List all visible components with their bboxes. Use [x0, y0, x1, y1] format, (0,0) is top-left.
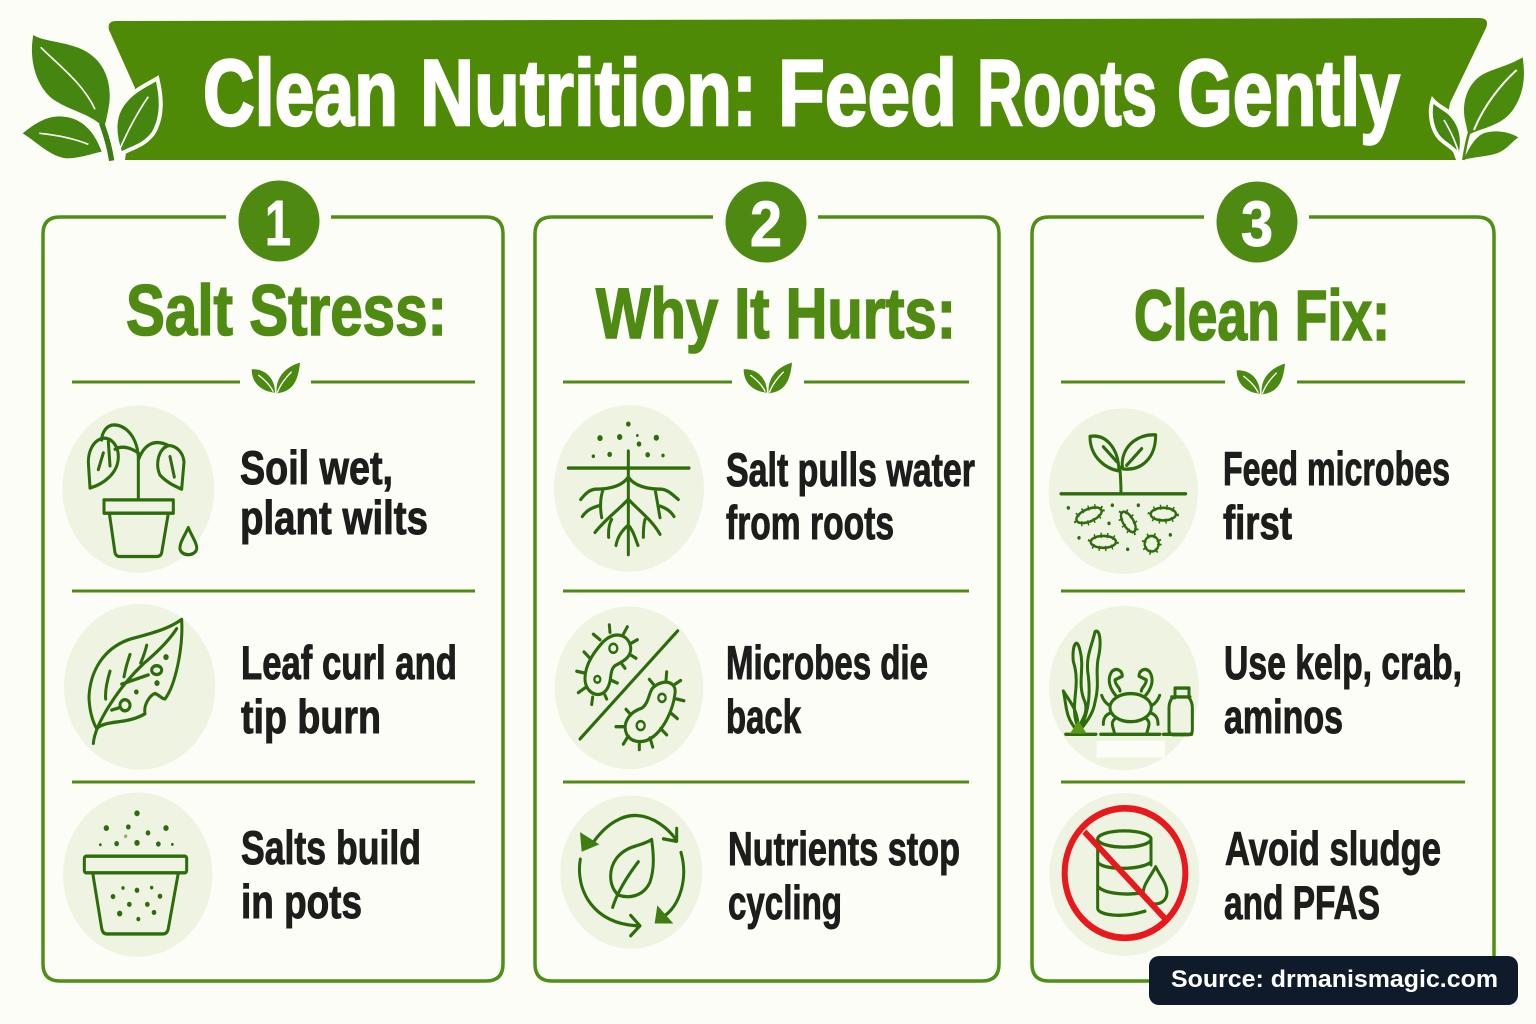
source badge	[1149, 956, 1518, 1005]
title text: Roots	[977, 40, 1157, 145]
title text: Clean	[203, 40, 398, 145]
icon: kelp, crab and jar	[1049, 606, 1199, 770]
title banner	[109, 18, 1487, 160]
text: avoid sludge: Avoid sludge	[1225, 822, 1441, 875]
text: salts build: Salts build	[241, 821, 421, 874]
title text	[203, 40, 1400, 145]
text: microbes die back: Microbes die	[726, 636, 928, 689]
heading: why it hurts: Why It Hurts:	[596, 275, 956, 354]
icon: leaf with cycling arrows	[560, 796, 702, 949]
text: soil wet	[240, 441, 428, 544]
row: leaf curl	[64, 604, 457, 770]
title text: Feed	[778, 40, 957, 145]
text: feed microbes: first	[1223, 496, 1292, 549]
number badge 1: 1	[265, 187, 291, 259]
text: salt pulls water: from roots	[726, 496, 894, 549]
icon: wilting plant in pot	[62, 406, 214, 573]
icon: pot with salt specks	[63, 793, 212, 957]
heading divider with sprig	[563, 363, 969, 393]
text: avoid sludge: and PFAS	[1224, 876, 1380, 929]
text: leaf curl: tip burn	[241, 690, 381, 743]
text: avoid sludge	[1224, 822, 1441, 929]
text: kelp crab aminos: aminos	[1224, 690, 1343, 743]
panel: clean fix	[1032, 182, 1494, 981]
icon: barrel with prohibition sign	[1049, 793, 1199, 956]
text: nutrients stop cycling	[728, 822, 960, 929]
row: salts build	[63, 793, 421, 957]
icon: roots under soil	[554, 405, 704, 572]
text: nutrients stop cycling: cycling	[728, 876, 842, 929]
heading divider with sprig	[1061, 364, 1465, 394]
text: soil wet: plant wilts	[240, 491, 428, 544]
row: soil wet	[62, 406, 428, 573]
icon: seedling over soil microbes	[1049, 408, 1198, 574]
row: kelp crab aminos	[1049, 606, 1462, 770]
icon: slashed microbes	[555, 606, 703, 769]
heading: salt stress: Salt Stress:	[126, 272, 447, 351]
number badge 3: 3	[1241, 188, 1273, 260]
text: salts build: in pots	[241, 875, 362, 928]
text: soil wet: Soil wet,	[240, 441, 393, 494]
title text: Nutrition:	[420, 40, 757, 145]
text: leaf curl: Leaf curl and	[241, 636, 457, 689]
number badge 3	[1216, 182, 1298, 262]
number badge 2	[726, 182, 806, 262]
heading divider with sprig	[72, 363, 475, 393]
row: avoid sludge	[1049, 793, 1441, 956]
text: nutrients stop cycling: Nutrients stop	[728, 822, 960, 875]
text: feed microbes	[1223, 442, 1450, 549]
text: salts build	[241, 821, 421, 928]
text: salt pulls water: Salt pulls water	[726, 443, 975, 496]
text: microbes die back	[726, 636, 928, 743]
text: leaf curl	[241, 636, 457, 743]
number badge 1	[238, 180, 320, 262]
text: salt pulls water	[726, 443, 975, 549]
row: microbes die back	[555, 606, 928, 769]
source badge: Source: drmanismagic.com	[1171, 966, 1498, 993]
icon: damaged leaf	[64, 604, 215, 770]
icon: left leaves	[23, 35, 161, 161]
row: nutrients stop cycling	[560, 796, 960, 949]
text: microbes die back: back	[726, 690, 802, 743]
panel: why it hurts	[535, 182, 999, 981]
heading: clean fix: Clean Fix:	[1134, 277, 1390, 356]
panel: salt stress	[43, 180, 503, 981]
number badge 2: 2	[750, 188, 782, 260]
icon: right leaves	[1431, 57, 1524, 160]
row: feed microbes	[1049, 408, 1450, 574]
row: salt pulls water	[554, 405, 975, 572]
title text: Gently	[1177, 40, 1400, 145]
text: kelp crab aminos	[1224, 636, 1462, 743]
